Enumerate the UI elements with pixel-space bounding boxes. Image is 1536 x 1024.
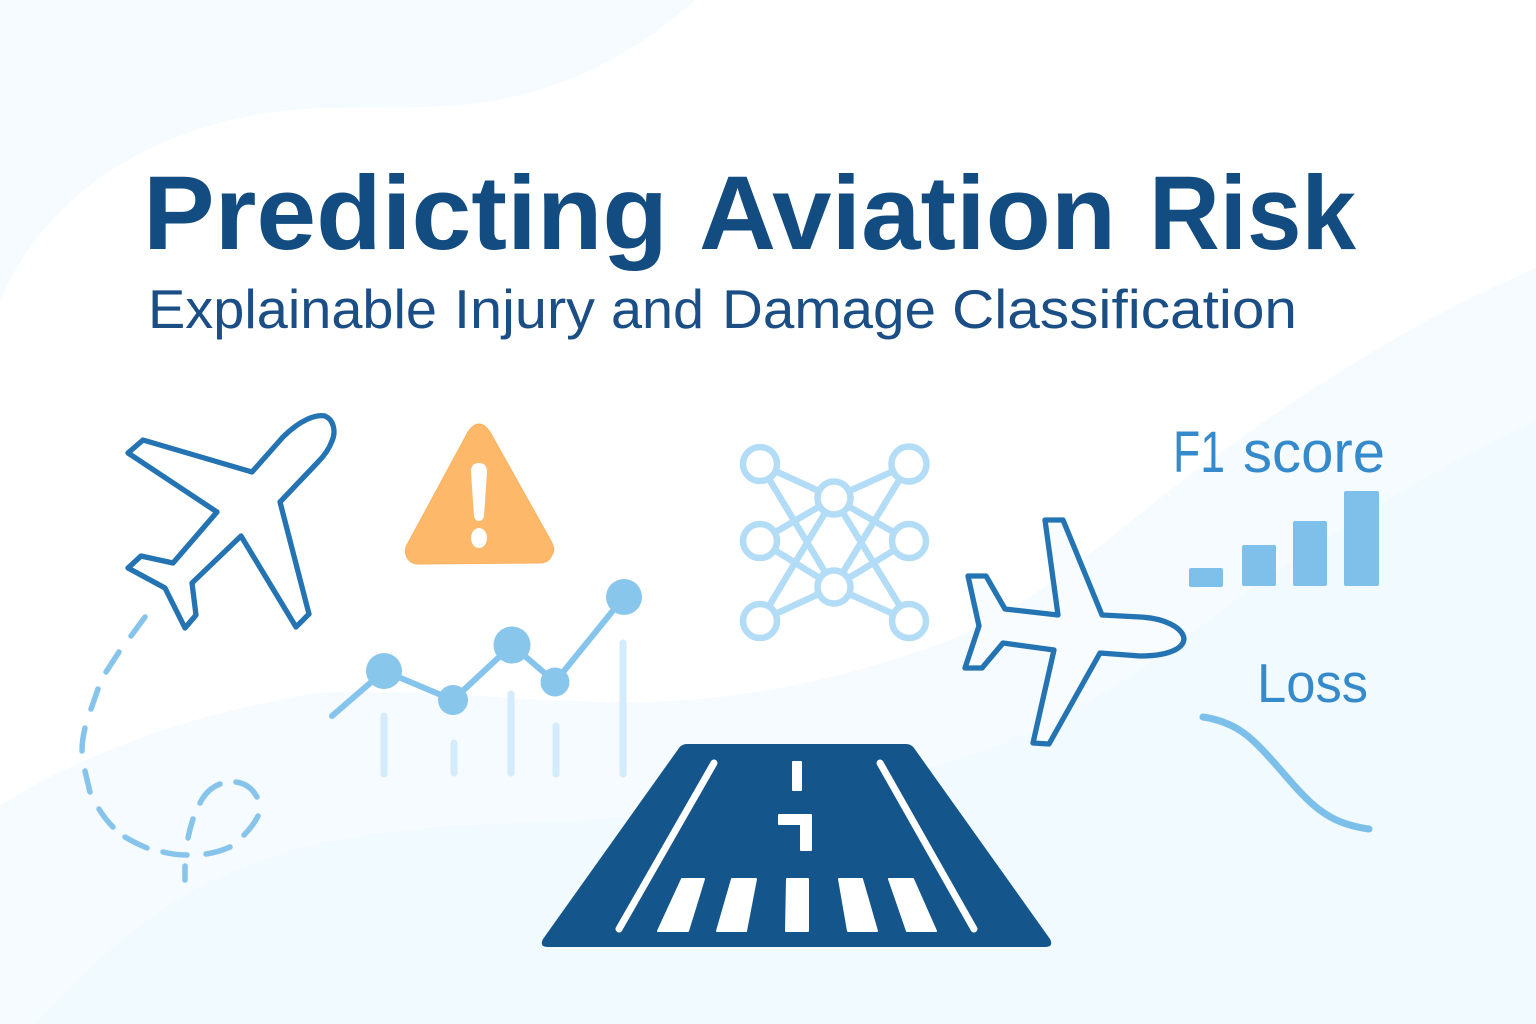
subtitle: Classification (952, 278, 1297, 340)
icon: warning triangle (405, 424, 554, 564)
icon: airplane left (128, 416, 334, 628)
label: F1 score: F1 (1173, 420, 1225, 485)
icon: airplane right (965, 520, 1184, 744)
label: F1 score (1173, 420, 1385, 485)
subtitle: and (611, 278, 704, 340)
dashed flight path (82, 617, 258, 880)
line chart (332, 579, 642, 774)
loss curve (1203, 717, 1369, 829)
icon: neural network (743, 446, 926, 638)
icon: runway (542, 744, 1051, 947)
title (143, 155, 1357, 272)
background wave: top left (0, 0, 695, 300)
background wave: bottom (36, 420, 1536, 1024)
background wave: lower right (0, 268, 1536, 1024)
subtitle (148, 278, 1297, 340)
title: Risk (1149, 155, 1357, 272)
label: F1 score: score (1243, 420, 1385, 485)
bar chart (1189, 491, 1379, 587)
label: Loss: Loss (1257, 652, 1368, 714)
title: Aviation (699, 155, 1116, 272)
title: Predicting (143, 155, 668, 272)
subtitle: Explainable (148, 278, 437, 340)
subtitle: Injury (454, 278, 596, 340)
subtitle: Damage (722, 278, 936, 340)
